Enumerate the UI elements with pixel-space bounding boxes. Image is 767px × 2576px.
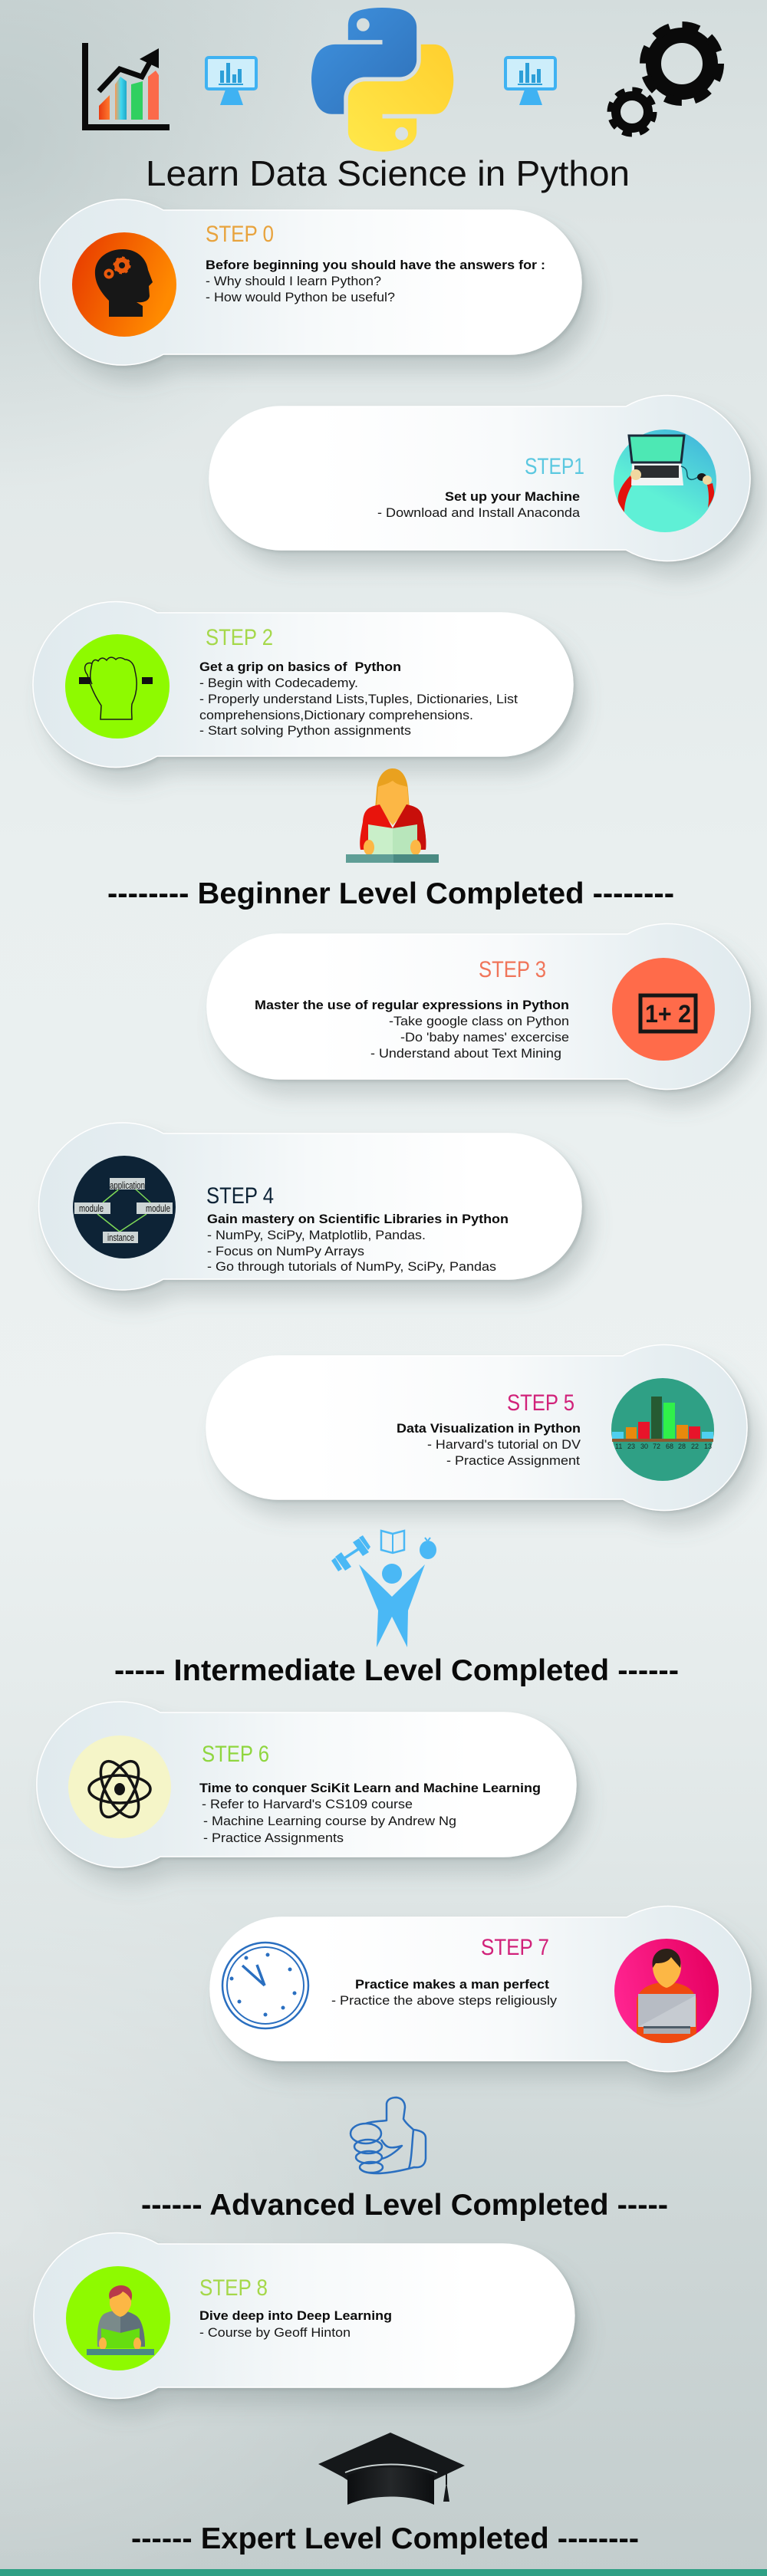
text block: Get a grip on basics of Python <box>199 660 401 674</box>
panel: step 8 <box>34 2232 574 2398</box>
icon: figure with dumbbell, book and apple <box>331 1531 436 1647</box>
icon: graduation cap <box>318 2433 465 2505</box>
title: Learn Data Science in Python <box>146 153 630 193</box>
card <box>34 2232 574 2398</box>
icon: woman reading <box>346 768 439 863</box>
icon: atom <box>68 1735 171 1838</box>
text block: - Practice Assignment <box>446 1453 580 1468</box>
icon: module diagram <box>73 1156 176 1258</box>
header icon: gears <box>610 26 719 134</box>
icon: bar chart: 28 <box>678 1443 686 1450</box>
header icon: python logo <box>311 8 453 152</box>
panel: step 5 <box>206 1345 747 1511</box>
text block: Master the use of regular expressions in Python <box>255 998 569 1012</box>
icon: bar chart: 68 <box>666 1443 673 1450</box>
heading: STEP 0 <box>206 222 274 247</box>
text block: - Focus on NumPy Arrays <box>207 1244 364 1258</box>
text block <box>206 258 545 304</box>
icon: 1+2 board <box>612 958 715 1061</box>
heading: STEP 4 <box>206 1183 274 1209</box>
icon: module diagram: application <box>110 1179 145 1191</box>
card <box>37 1702 576 1867</box>
header icon: line and bar chart <box>85 43 170 127</box>
heading: STEP 3 <box>479 957 546 982</box>
text block: -Do 'baby names' excercise <box>400 1030 569 1045</box>
card <box>40 199 581 365</box>
text block: - Understand about Text Mining <box>370 1046 561 1061</box>
panel: step 1 <box>209 396 750 561</box>
level heading: beginner: -------- Beginner Level Completed -------- <box>107 877 674 910</box>
footer bar <box>0 2569 767 2576</box>
heading: STEP 8 <box>199 2275 268 2301</box>
text block: Gain mastery on Scientific Libraries in Python <box>207 1212 509 1226</box>
icon: bar chart: 11 <box>615 1443 622 1450</box>
card <box>210 1907 751 2072</box>
icon: clock <box>222 1943 308 2028</box>
icon: fist <box>65 634 170 739</box>
text block: - Practice Assignments <box>203 1831 344 1845</box>
text block: - Course by Geoff Hinton <box>199 2325 351 2340</box>
text block: -Take google class on Python <box>389 1014 569 1028</box>
icon: 1+2 board: 1+ 2 <box>645 1000 691 1028</box>
level heading: intermediate: ----- Intermediate Level Completed ------ <box>114 1654 679 1687</box>
text block <box>199 1781 541 1845</box>
icon: module diagram: module <box>146 1202 170 1214</box>
text block: - Download and Install Anaconda <box>377 505 581 520</box>
text block: Practice makes a man perfect <box>355 1977 549 1992</box>
panel: step 6 <box>37 1702 576 1867</box>
text block <box>199 2308 392 2340</box>
level heading: advanced: ------ Advanced Level Completed ----- <box>141 2189 668 2222</box>
text block <box>397 1421 581 1468</box>
card <box>209 396 750 561</box>
card <box>39 1123 581 1290</box>
header icon: left monitor <box>206 58 256 105</box>
icon: bar chart: 13 <box>704 1443 712 1450</box>
text block: comprehensions,Dictionary comprehensions. <box>199 708 473 722</box>
text block: Set up your Machine <box>445 489 580 504</box>
heading: STEP 7 <box>481 1935 549 1960</box>
icon: thumbs up <box>351 2097 426 2173</box>
text block: - Harvard's tutorial on DV <box>427 1437 581 1452</box>
icon: bar chart: 72 <box>653 1443 660 1450</box>
icon: bar chart: 30 <box>640 1443 648 1450</box>
text block: - Start solving Python assignments <box>199 723 411 738</box>
heading: STEP1 <box>525 454 584 479</box>
text block: - How would Python be useful? <box>206 290 395 304</box>
text block: - Practice the above steps religiously <box>331 1993 558 2008</box>
card <box>33 601 573 768</box>
icon: head with gears <box>72 232 176 337</box>
text block: - Properly understand Lists,Tuples, Dictionaries, List <box>199 692 518 706</box>
text block: Dive deep into Deep Learning <box>199 2308 392 2323</box>
panel: step 4 <box>39 1123 581 1290</box>
text block: - Go through tutorials of NumPy, SciPy, Pandas <box>207 1259 496 1274</box>
heading: STEP 5 <box>507 1390 574 1416</box>
text block: - Refer to Harvard's CS109 course <box>202 1797 413 1811</box>
icon: bar chart: 23 <box>627 1443 635 1450</box>
panel: step 7 <box>210 1907 751 2072</box>
panel: step 0 <box>40 199 581 365</box>
panel: step 2 <box>33 601 573 768</box>
text block <box>199 660 518 738</box>
card <box>206 1345 747 1511</box>
card <box>207 923 750 1089</box>
icon: laptop and hands <box>614 429 716 532</box>
icon: person with laptop <box>614 1939 719 2048</box>
icon: bar chart <box>611 1378 714 1481</box>
icon: module diagram: instance <box>107 1232 134 1243</box>
heading: STEP 2 <box>206 625 273 650</box>
text block: - Begin with Codecademy. <box>199 676 358 690</box>
text block: Data Visualization in Python <box>397 1421 581 1436</box>
heading: STEP 6 <box>202 1742 269 1767</box>
header icon: right monitor <box>505 58 555 105</box>
text block <box>377 489 581 520</box>
panel: step 3 <box>207 923 750 1089</box>
text block <box>255 998 569 1061</box>
text block: - Machine Learning course by Andrew Ng <box>203 1814 456 1828</box>
text block <box>207 1212 509 1274</box>
text block: Time to conquer SciKit Learn and Machine Learning <box>199 1781 541 1795</box>
level heading: expert: ------ Expert Level Completed -------- <box>131 2522 639 2555</box>
text block: - Why should I learn Python? <box>206 274 381 288</box>
icon: module diagram: module <box>79 1202 104 1214</box>
text block: - NumPy, SciPy, Matplotlib, Pandas. <box>207 1228 426 1242</box>
icon: bar chart: 22 <box>691 1443 699 1450</box>
icon: person reading <box>66 2266 170 2370</box>
text block <box>331 1977 558 2008</box>
text block: Before beginning you should have the answers for : <box>206 258 545 272</box>
